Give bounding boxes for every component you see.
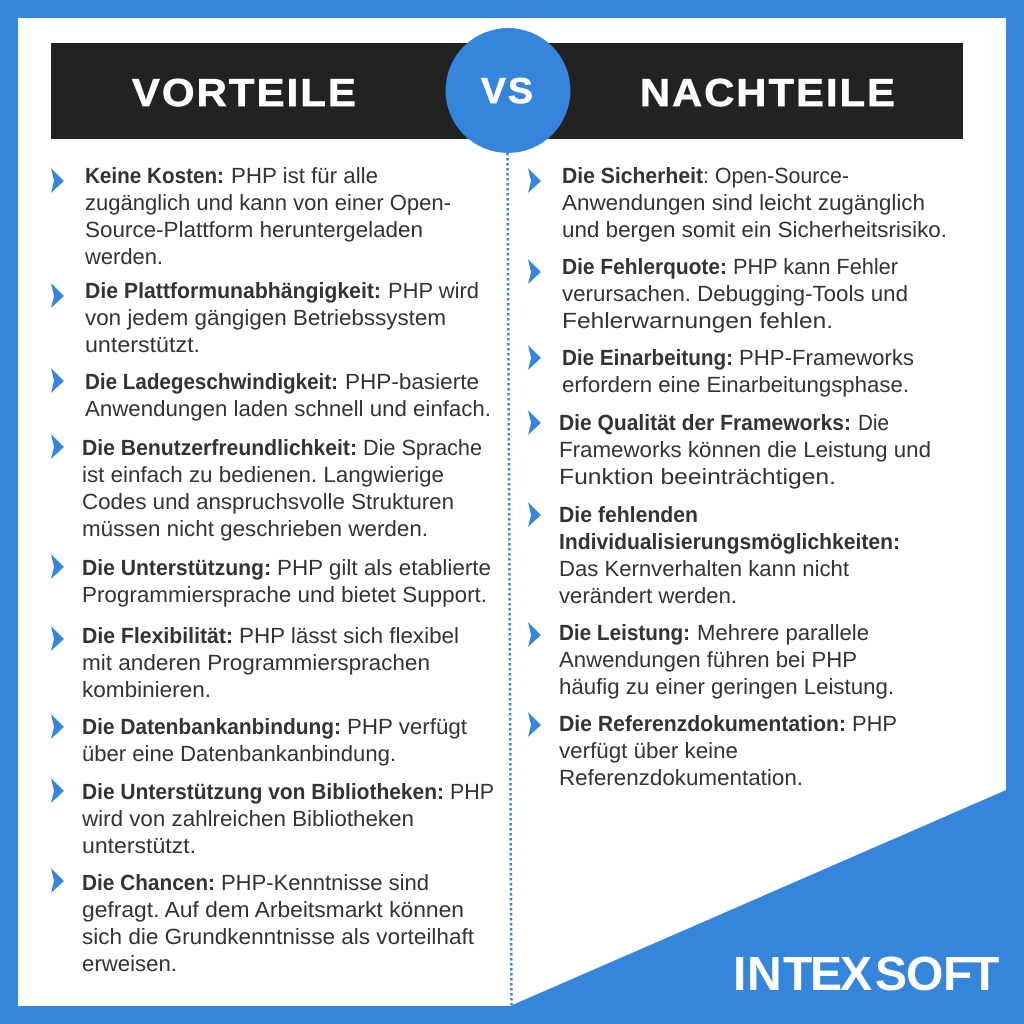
item: Einarbeitung: erfordern eine Einarbeitungsphase. — [562, 372, 909, 397]
item: Referenzdokumentation: PHP — [852, 711, 897, 736]
item: Benutzerfreundlichkeit: müssen nicht geschrieben werden. — [82, 516, 428, 541]
item: fehlende Individualisierungsmöglichkeiten: verändert werden. — [559, 583, 737, 608]
item: Qualität der Frameworks: Die — [858, 410, 889, 435]
item: Referenzdokumentation: Die Referenzdokumentation: — [559, 711, 846, 736]
item: fehlende Individualisierungsmöglichkeiten: Das Kernverhalten kann nicht — [559, 556, 849, 581]
item: Leistung: häufig zu einer geringen Leistung. — [559, 674, 894, 699]
item: Benutzerfreundlichkeit: Codes und anspruchsvolle Strukturen — [82, 489, 454, 514]
item: Bibliotheken — [51, 778, 494, 858]
item: Leistung — [528, 620, 894, 699]
VS badge: VS — [481, 70, 535, 111]
item: Qualität der Frameworks: Funktion beeinträchtigen. — [559, 464, 836, 489]
item: Sicherheit: Anwendungen sind leicht zugänglich — [562, 190, 925, 215]
item: Qualität der Frameworks: Die Qualität der Frameworks: — [559, 410, 851, 435]
item: Plattformunabhängigkeit: PHP wird — [388, 278, 479, 303]
item: Ladegeschwindigkeit: Die Ladegeschwindigkeit: — [85, 369, 338, 394]
item: Einarbeitung — [528, 345, 914, 397]
item: Chancen: PHP-Kenntnisse sind — [221, 870, 429, 895]
item: Chancen: sich die Grundkenntnisse als vorteilhaft — [82, 924, 474, 949]
item: Keine Kosten: Source-Plattform heruntergeladen — [85, 217, 423, 242]
item: fehlende Individualisierungsmöglichkeiten: Individualisierungsmöglichkeiten: — [559, 529, 900, 554]
item: fehlende Individualisierungsmöglichkeiten — [528, 502, 900, 608]
item: Datenbankanbindung: über eine Datenbankanbindung. — [82, 741, 396, 766]
heading: Nachteile: NACHTEILE — [640, 72, 897, 115]
item: Bibliotheken: unterstützt. — [82, 833, 196, 858]
item: Qualität der Frameworks: Frameworks können die Leistung und — [559, 437, 931, 462]
item: Flexibilität: Die Flexibilität: — [82, 623, 233, 648]
item: Datenbankanbindung — [51, 714, 467, 766]
item: Chancen: erweisen. — [82, 951, 177, 976]
item: Ladegeschwindigkeit: Anwendungen laden schnell und einfach. — [85, 396, 491, 421]
item: Plattformunabhängigkeit — [51, 278, 479, 357]
item: Fehlerquote: Die Fehlerquote: — [562, 254, 727, 279]
item: Plattformunabhängigkeit: von jedem gängigen Betriebssystem — [85, 305, 446, 330]
item: Benutzerfreundlichkeit: Die Benutzerfreundlichkeit: — [82, 435, 357, 460]
item: Sicherheit: und bergen somit ein Sicherheitsrisiko. — [562, 217, 947, 242]
item: Fehlerquote: verursachen. Debugging-Tools und — [562, 281, 908, 306]
item: Referenzdokumentation — [528, 711, 897, 790]
panel: Nachteile list — [528, 163, 947, 790]
heading: Vorteile: VORTEILE — [132, 72, 358, 115]
item: Referenzdokumentation: verfügt über keine — [559, 738, 738, 763]
item: Bibliotheken: Die Unterstützung von Bibliotheken: — [82, 779, 444, 804]
item: Keine Kosten: PHP ist für alle — [231, 163, 378, 188]
item: Fehlerquote: Fehlerwarnungen fehlen. — [562, 308, 833, 333]
item: Chancen: gefragt. Auf dem Arbeitsmarkt können — [82, 897, 464, 922]
item: Datenbankanbindung: PHP verfügt — [347, 714, 467, 739]
item: Sicherheit — [528, 163, 947, 242]
item: Bibliotheken: PHP — [450, 779, 494, 804]
item: Ladegeschwindigkeit: PHP-basierte — [345, 369, 479, 394]
VS badge — [446, 28, 570, 153]
item: Flexibilität: kombinieren. — [82, 677, 211, 702]
item: Fehlerquote: PHP kann Fehler — [733, 254, 898, 279]
item: fehlende Individualisierungsmöglichkeiten: Die fehlenden — [559, 502, 698, 527]
item: Keine Kosten: werden. — [84, 244, 163, 269]
panel: Vorteile list — [51, 163, 494, 976]
header banner — [51, 43, 963, 139]
item: Fehlerquote — [528, 254, 908, 333]
item: Chancen — [51, 868, 474, 976]
item: Benutzerfreundlichkeit: Die Sprache — [363, 435, 482, 460]
item: Leistung: Mehrere parallele — [697, 620, 869, 645]
item: Qualität der Frameworks — [528, 410, 931, 489]
item: Keine Kosten: zugänglich und kann von einer Open- — [85, 190, 451, 215]
item: Benutzerfreundlichkeit: ist einfach zu bedienen. Langwierige — [82, 462, 444, 487]
item: Sicherheit: Die Sicherheit — [562, 163, 704, 188]
item: Datenbankanbindung: Die Datenbankanbindung: — [82, 714, 341, 739]
item: Flexibilität — [51, 623, 459, 702]
item: Keine Kosten — [51, 163, 451, 269]
item: Unterstützung: Programmiersprache und bietet Support. — [82, 582, 487, 607]
item: Ladegeschwindigkeit — [51, 368, 491, 421]
dotted centre divider — [508, 153, 512, 1005]
item: Leistung: Anwendungen führen bei PHP — [559, 647, 857, 672]
item: Flexibilität: PHP lässt sich flexibel — [239, 623, 459, 648]
item: Referenzdokumentation: Referenzdokumentation. — [559, 765, 803, 790]
item: Sicherheit: : Open-Source- — [703, 163, 849, 188]
item: Leistung: Die Leistung: — [559, 620, 690, 645]
item: Einarbeitung: PHP-Frameworks — [739, 345, 914, 370]
item: Keine Kosten: Keine Kosten: — [85, 163, 224, 188]
logo: INTEXSOFT: INTEXSOFT — [733, 948, 999, 1001]
item: Plattformunabhängigkeit: unterstützt. — [85, 332, 200, 357]
item: Unterstützung: PHP gilt als etablierte — [277, 555, 491, 580]
item: Chancen: Die Chancen: — [82, 870, 215, 895]
item: Flexibilität: mit anderen Programmiersprachen — [82, 650, 430, 675]
item: Unterstützung: Die Unterstützung: — [82, 555, 271, 580]
item: Benutzerfreundlichkeit — [51, 434, 482, 541]
item: Bibliotheken: wird von zahlreichen Bibliotheken — [81, 806, 414, 831]
item: Plattformunabhängigkeit: Die Plattformunabhängigkeit: — [85, 278, 381, 303]
item: Einarbeitung: Die Einarbeitung: — [562, 345, 733, 370]
item: Unterstützung — [51, 554, 491, 607]
